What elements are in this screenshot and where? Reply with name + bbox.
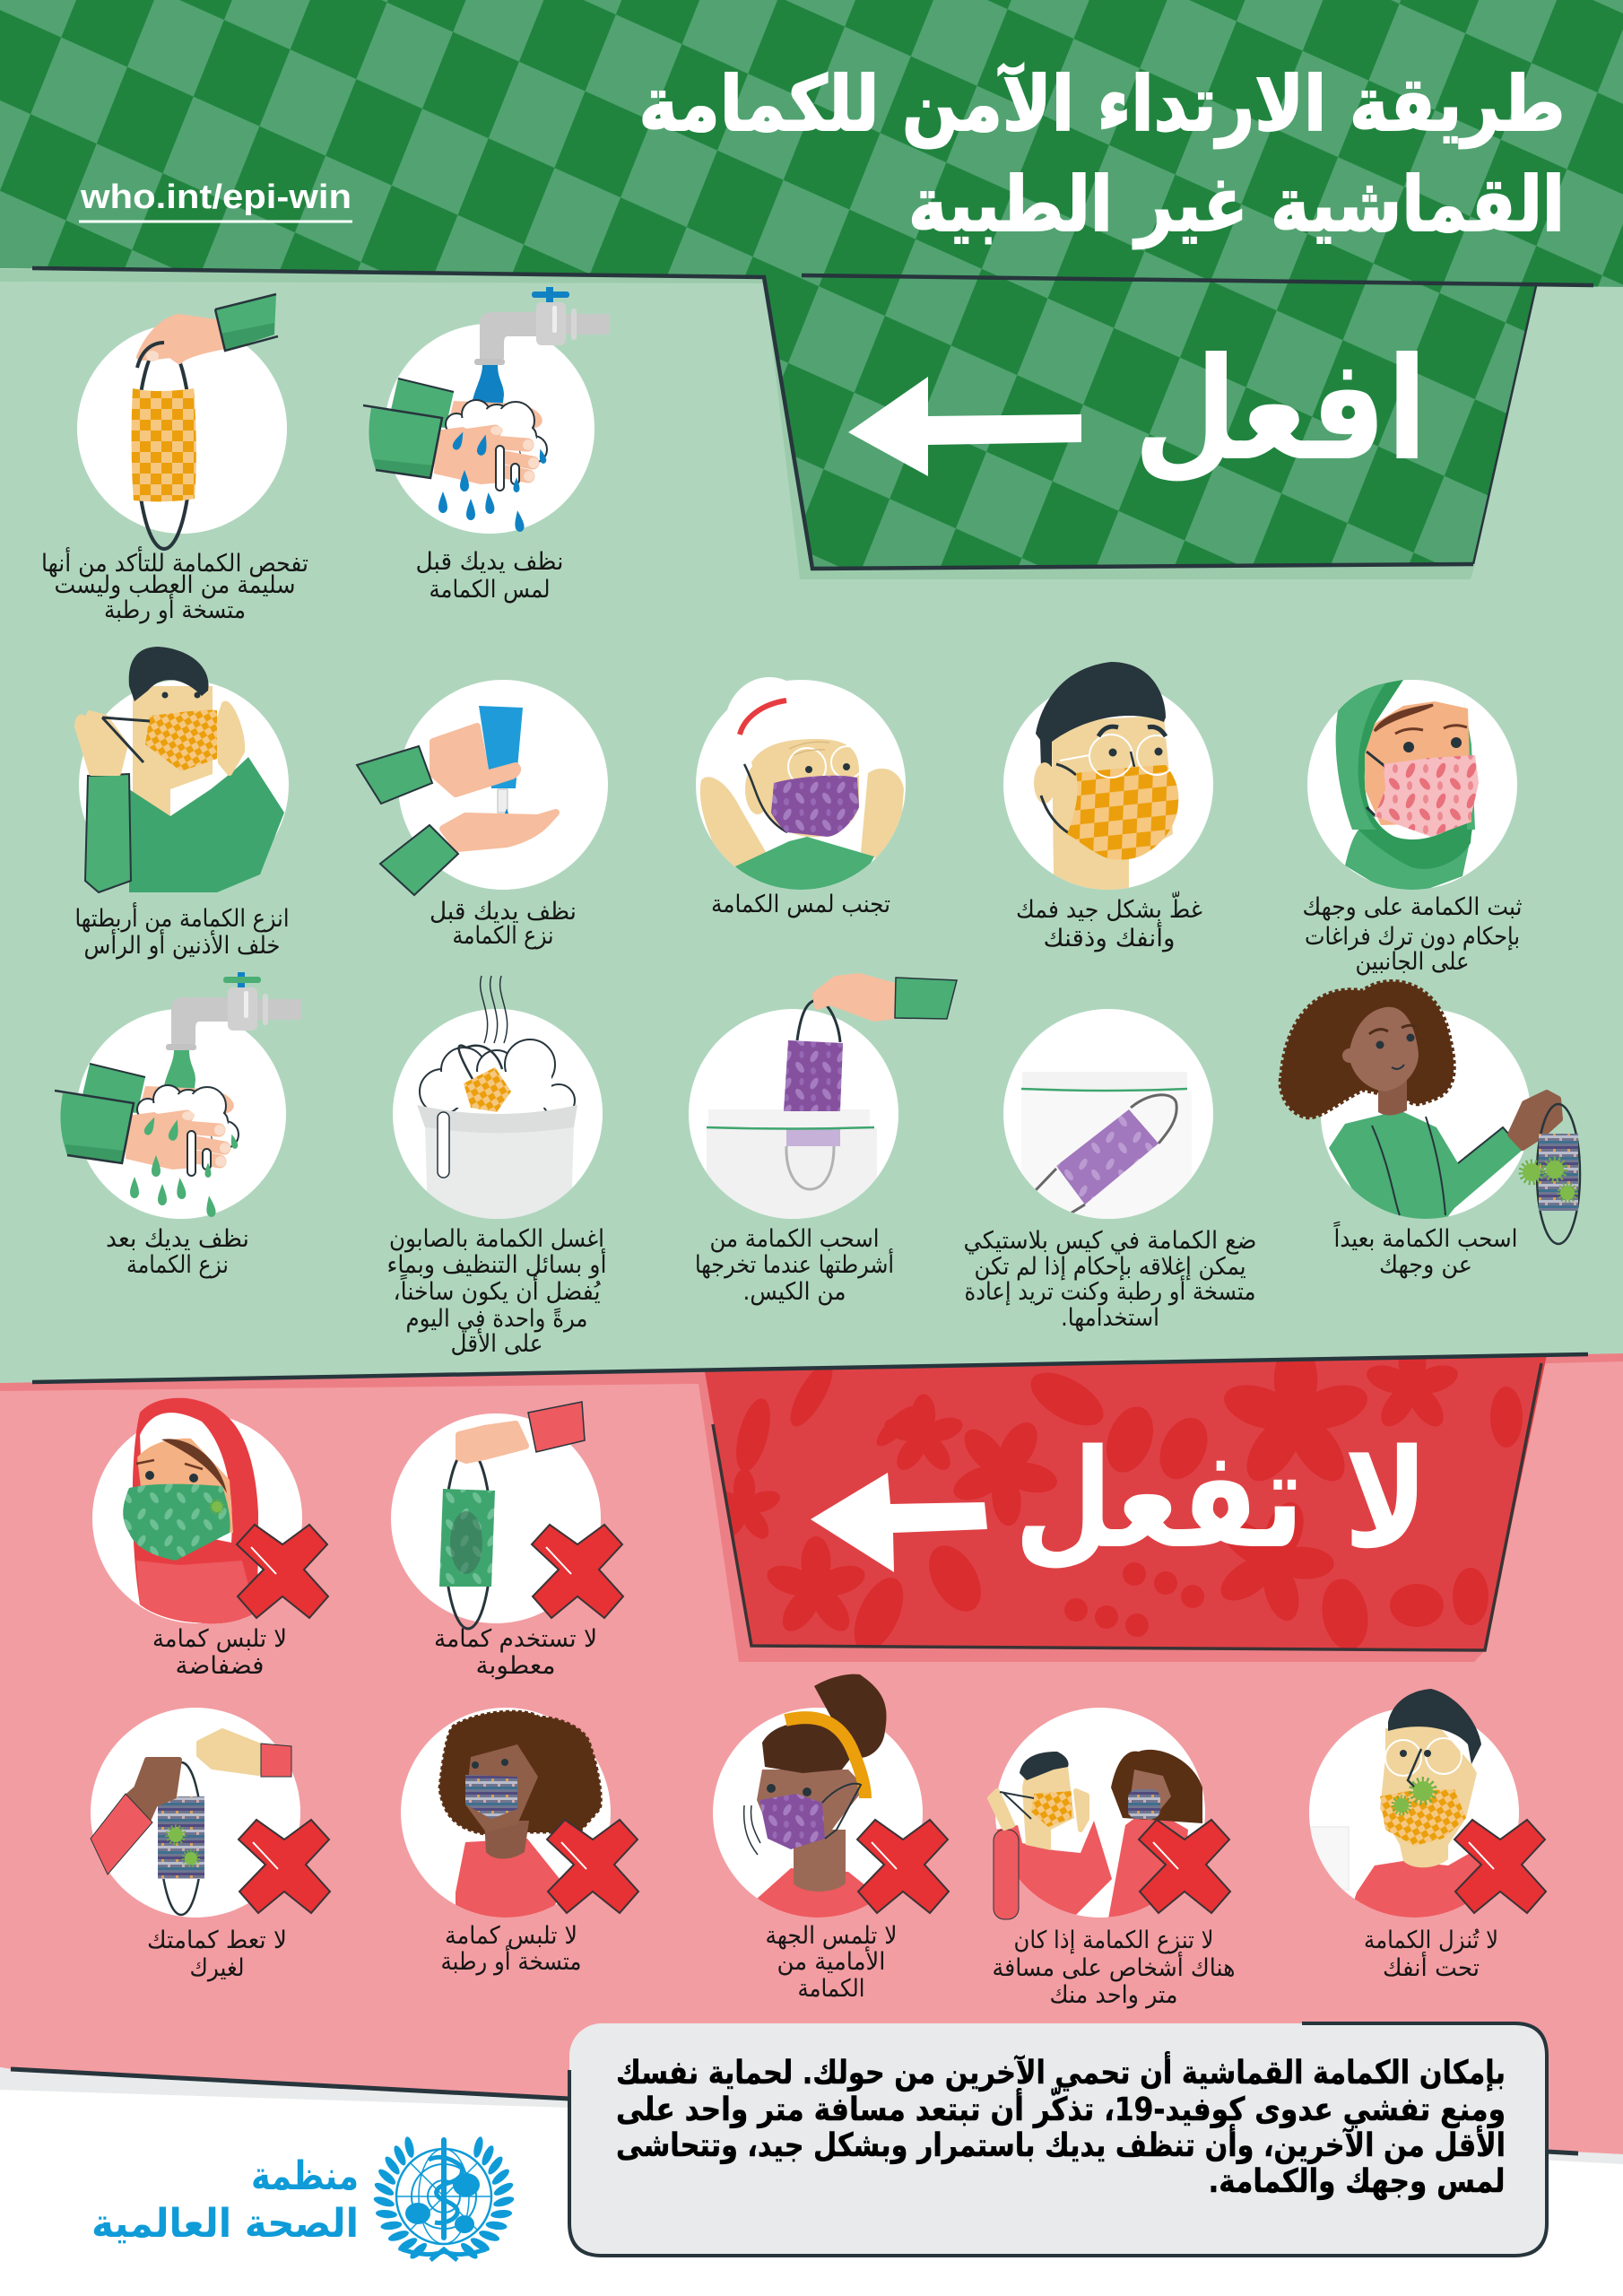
- step: no damaged mask: معطوبة: [475, 1652, 556, 1680]
- step: inspect mask: سليمة من العطب وليست: [54, 571, 296, 599]
- website link: who.int/epi-win: [80, 178, 352, 216]
- step: put mask in plastic bag: [963, 1009, 1257, 1332]
- step: remove mask by straps: انزع الكمامة من أربطتها: [75, 901, 289, 933]
- step: do not touch front of mask: [713, 1674, 949, 2003]
- step: inspect mask: متسخة أو رطبة: [104, 593, 246, 624]
- step: do not give mask to others: لا تعط كمامتك: [147, 1926, 287, 1954]
- step: pull mask away from face: اسحب الكمامة بعيداً: [1333, 1221, 1517, 1253]
- footer band shadow: [0, 2067, 1623, 2164]
- panel: green header with checker pattern: [0, 0, 1623, 569]
- step: do not remove mask near others: [990, 1708, 1236, 2009]
- step: clean hands before removing: نزع الكمامة: [452, 922, 554, 950]
- logo: WHO wordmark: منظمة: [251, 2153, 359, 2199]
- step: do not give mask to others: [91, 1708, 330, 1982]
- step: wash hands before: لمس الكمامة: [429, 576, 551, 604]
- floral pattern: [706, 1338, 1523, 1658]
- step: do not lower mask under nose: تحت أنفك: [1383, 1951, 1480, 1982]
- step: wash mask with soap: على الأقل: [450, 1327, 543, 1358]
- step: inspect mask: تفحص الكمامة للتأكد من أنها: [41, 545, 308, 578]
- step: pull mask away from face: عن وجهك: [1379, 1251, 1472, 1279]
- panel: information callout: لمس وجهك والكمامة.: [1209, 2163, 1505, 2200]
- header and do sign outline: [32, 268, 1593, 569]
- step: pull mask out of bag by straps: من الكيس.: [742, 1278, 846, 1306]
- step: no damaged mask: [391, 1402, 623, 1680]
- step: do not touch front of mask: الأمامية من: [777, 1945, 886, 1976]
- step: wash mask with soap: [387, 976, 606, 1358]
- step: wash mask with soap: اغسل الكمامة بالصابون: [389, 1225, 604, 1253]
- step: pull mask out of bag by straps: أشرطتها عندما تخرجها: [695, 1248, 894, 1279]
- step: cover mouth nose chin: [1003, 662, 1213, 952]
- section divider line: [32, 1354, 1588, 1382]
- step: wash mask with soap: مرةً واحدة في اليوم: [405, 1305, 588, 1333]
- panel: do section background: [0, 268, 1623, 1383]
- step: do not give mask to others: لغيرك: [190, 1954, 244, 1982]
- step: remove mask by straps: خلف الأذنين أو الرأس: [84, 928, 280, 960]
- panel: information callout: ومنع تفشي عدوى كوفيد-19، تذكّر أن تبتعد مسافة متر واحد على: [616, 2086, 1506, 2128]
- step: do not wear dirty mask: متسخة أو رطبة: [441, 1944, 581, 1976]
- step: secure mask: [1302, 680, 1523, 976]
- step: wash hands after: نظف يديك بعد: [106, 1225, 249, 1253]
- do not section divider line: [11, 2069, 1578, 2153]
- step: do not lower mask under nose: لا تُنزل الكمامة: [1364, 1926, 1498, 1954]
- step: put mask in plastic bag: يمكن إغلاقه بإحكام إذا لم تكن: [974, 1253, 1246, 1281]
- do section header shadow: [0, 269, 1475, 579]
- step: secure mask: بإحكام دون ترك فراغات: [1305, 923, 1520, 951]
- panel: red do not sign: [705, 1355, 1547, 1650]
- step: no loose mask: لا تلبس كمامة: [152, 1625, 287, 1653]
- step: wash hands before: نظف يديك قبل: [416, 548, 563, 576]
- step: wash mask with soap: أو بسائل التنظيف وبماء: [387, 1248, 606, 1279]
- logo: WHO emblem: [372, 2135, 516, 2261]
- panel: do not section background: [0, 1345, 1623, 2154]
- step: cover mouth nose chin: غطّ بشكل جيد فمك: [1016, 891, 1202, 924]
- step: do not remove mask near others: لا تنزع الكمامة إذا كان: [1013, 1926, 1214, 1954]
- step: do not wear dirty mask: لا تلبس كمامة: [445, 1922, 577, 1950]
- step: cover mouth nose chin: وأنفك وذقنك: [1044, 921, 1175, 952]
- step: secure mask: على الجانبين: [1356, 948, 1469, 976]
- step: do not remove mask near others: هناك أشخاص على مسافة: [992, 1951, 1236, 1982]
- step: remove mask by straps: [75, 647, 289, 960]
- step: wash mask with soap: يُفضل أن يكون ساخناً،: [393, 1274, 601, 1306]
- step: avoid touching mask: تجنب لمس الكمامة: [711, 891, 890, 918]
- step: no loose mask: فضفاضة: [176, 1652, 264, 1680]
- step: put mask in plastic bag: متسخة أو رطبة وكنت تريد إعادة: [965, 1274, 1255, 1306]
- heading: do not: لا تفعل: [1014, 1420, 1428, 1578]
- title: [638, 60, 1566, 249]
- step: secure mask: ثبت الكمامة على وجهك: [1302, 893, 1523, 921]
- step: pull mask away from face: [1280, 981, 1580, 1279]
- step: do not lower mask under nose: [1309, 1689, 1546, 1982]
- step: do not wear dirty mask: [401, 1708, 638, 1976]
- step: do not remove mask near others: متر واحد منك: [1049, 1981, 1178, 2009]
- do not sign outline: [713, 1363, 1541, 1650]
- step: do not touch front of mask: الكمامة: [798, 1975, 864, 2003]
- arrow: do not: [811, 1473, 987, 1572]
- step: put mask in plastic bag: ضع الكمامة في كيس بلاستيكي: [963, 1227, 1257, 1255]
- step: wash hands after: [55, 972, 301, 1279]
- logo: WHO wordmark: [91, 2153, 359, 2247]
- heading: do: افعل: [1133, 327, 1428, 492]
- step: clean hands before removing: [357, 680, 608, 950]
- step: inspect mask: [41, 294, 308, 624]
- step: put mask in plastic bag: استخدامها.: [1061, 1304, 1159, 1332]
- step: pull mask out of bag by straps: اسحب الكمامة من: [710, 1225, 879, 1253]
- red section top shadow: [0, 1353, 1623, 1391]
- step: wash hands before: [363, 287, 610, 604]
- panel: red do not sign shadow: [699, 1355, 1541, 1662]
- logo: WHO wordmark: الصحة العالمية: [91, 2201, 359, 2247]
- step: pull mask out of bag by straps: [689, 977, 957, 1306]
- step: avoid touching mask: [696, 677, 906, 918]
- step: clean hands before removing: نظف يديك قبل: [430, 898, 577, 926]
- step: no damaged mask: لا تستخدم كمامة: [434, 1625, 597, 1653]
- step: do not touch front of mask: لا تلمس الجهة: [766, 1922, 897, 1950]
- step: wash hands after: نزع الكمامة: [126, 1251, 229, 1279]
- panel: do not steps: [91, 1398, 1546, 2009]
- panel: information callout: [569, 2023, 1547, 2256]
- step: no loose mask: [92, 1398, 328, 1680]
- panel: do steps: [41, 287, 1580, 1358]
- arrow: do: [848, 377, 1081, 476]
